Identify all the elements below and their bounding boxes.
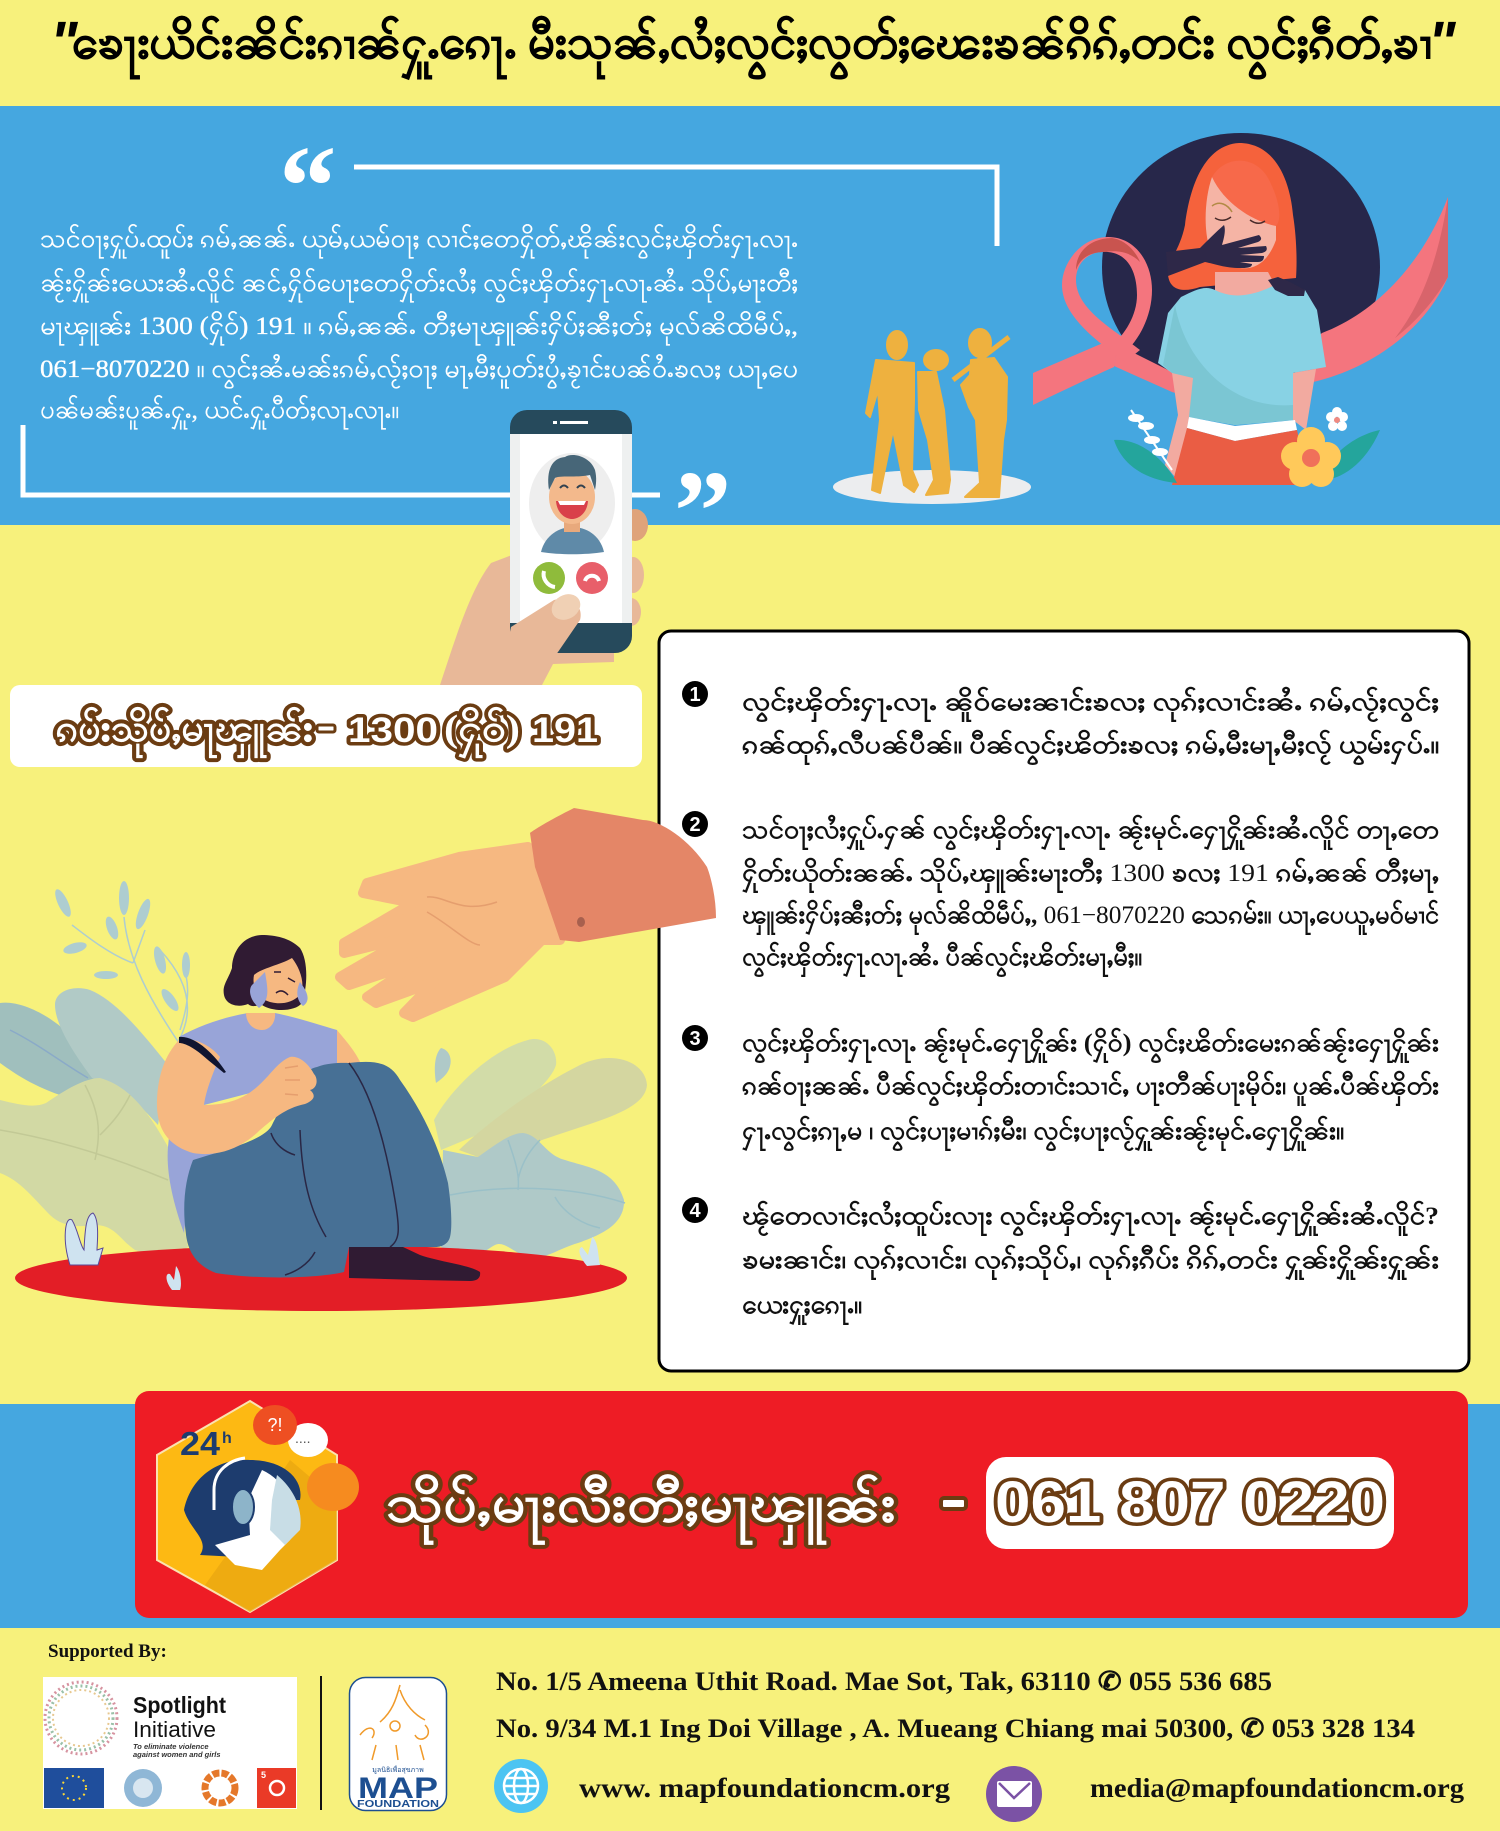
sub-panel: item 3: လွင်ႈၾိတ်းႁႃႉလႃႉ ၼႂ်းမုင်ႉႁေႃႁိူၼ်း (ႁိုဝ်) လွင်ႈၽိတ်းမေးၵၼ်ၼႂ်းႁေႃႁိူၼ်း (742, 1028, 1439, 1063)
address: Chiang Mai: No. 9/34 M.1 Ing Doi Village , A. Mueang Chiang mai 50300, ✆ 053 328 134 (496, 1714, 1415, 1743)
helpline label (10, 685, 642, 767)
divider (320, 1676, 322, 1810)
icon: 24h call center hexagon: h (222, 1430, 232, 1447)
illustration: crying woman (0, 881, 647, 1311)
sub-panel: item 3: ႁႃႉလွင်ႈၵႃႇမ ၊ လွင်ႈပႃႈမၢၵ်ႈမီး၊ လွင်ႈပႃႈလႂ်ႁူၼ်းၼႂ်းမုင်ႉႁေႃႁိူၼ်း။ (742, 1116, 1344, 1151)
logo: MAP Foundation: FOUNDATION (357, 1799, 439, 1810)
title: " (50, 10, 79, 75)
sub-panel: item 4: ၶမးၼၢင်း၊ လုၵ်ႈလၢင်း၊ လုၵ်ႈသိုပ်ႇ၊ လုၵ်ႈၵီပ်း ၵိၵ်ႇတင်း ႁူၼ်းႁိူၼ်းႁူၼ်း (742, 1245, 1439, 1280)
illustration: group of men silhouettes (833, 329, 1031, 504)
phone number: 061 807 0220 (995, 1470, 1385, 1535)
sub-panel: item 2: သင်ဝႃႈလႆႈႁူပ်ႉႁၼ် လွင်ႈၾိတ်းႁႃႉလႃႉ ၼႂ်းမုင်ႉႁေႃႁိူၼ်းၼႆႉလိူင် တႃႇတေ (742, 815, 1439, 850)
logo: Spotlight Initiative: To eliminate violence (133, 1742, 209, 1751)
sub-panel: item 3 (682, 1025, 1439, 1151)
icon: closing quotation mark: ” (674, 448, 732, 575)
email: media@mapfoundationcm.org (1090, 1773, 1465, 1803)
logo: Spotlight Initiative: Spotlight (133, 1692, 226, 1718)
helpline label: 1300 (348, 711, 438, 750)
panel: red hotline banner (135, 1391, 1468, 1618)
sub-panel: item 1: လွင်ႈၾိတ်းႁႃႉလႃႉ ၼိူဝ်မေးၼၢင်းၶလႈ လုၵ်ႈလၢင်းၼႆႉ ၵမ်ႇလႂ်ႈလွင်ႈ (742, 687, 1439, 722)
logo: Spotlight Initiative (43, 1677, 297, 1809)
panel: blue intro band (0, 106, 1500, 525)
sub-panel: item 4 (682, 1197, 1439, 1325)
dash (941, 1498, 966, 1509)
sub-panel: item 2: ႁိုတ်းယိုတ်းၼၼ်ႉ သိုပ်ႇၾူၼ်းမႃးတီႈ 1300 ၶလႈ 191 ၵမ်ႇၼၼ် တီႈမႃႇ (742, 858, 1439, 893)
logo: Spotlight Initiative: 5 (261, 1770, 266, 1780)
sub-panel: item 3: ၵၼ်ဝႃႈၼၼ်ႉ ပီၼ်လွင်ႈၾိတ်းတၢင်းသၢင်ႇ ပႃးတီၼ်ပႃးမိုဝ်း၊ ပူၼ်ႉပီၼ်ၾိတ်း (742, 1071, 1439, 1106)
website: www. mapfoundationcm.org (579, 1773, 951, 1803)
address: Mae Sot: No. 1/5 Ameena Uthit Road. Mae Sot, Tak, 63110 ✆ 055 536 685 (496, 1667, 1272, 1696)
icon: opening quotation mark: “ (279, 123, 336, 250)
icon: 24h call center hexagon: ?! (267, 1415, 283, 1435)
text block: intro: 061−8070220 ။ လွင်ႈၼႆႉမၼ်းၵမ်ႇလႂ်ႈဝႃႈ မႃႇမီႈပူတ်းပွႆႇၶႂၢင်းပၼ်ဝႆႉၶလႈ ယႃႇပေ (40, 354, 798, 389)
phone number (986, 1457, 1394, 1549)
text block: intro: မႃၾူၼ်း 1300 (ႁိုဝ်) 191 ။ ၵမ်ႇၼၼ်ႉ တီႈမႃၾူၼ်းႁိပ်ႈၼီႈတ်ႈ မုလ်ၼိထိမဵပ်ႇ, (40, 311, 798, 346)
logo: Spotlight Initiative: against women and girls (133, 1750, 221, 1759)
heading: call this number: သိုပ်ႇမႃးလီးတီႈမႃၾူၼ်း (386, 1474, 896, 1545)
supported by label: Supported By: (48, 1641, 167, 1662)
icon: 24h call center hexagon (157, 1401, 359, 1612)
sub-panel: item 4: 4 (689, 1200, 701, 1222)
icon: globe (494, 1759, 548, 1813)
logo: MAP Foundation: MAP (358, 1772, 438, 1805)
sub-panel: item 2: လွင်ႈၾိတ်းႁႃႉလႃႉၼႆႉ ပီၼ်လွင်ႈၽိတ်းမႃႇမီႈ။ (742, 942, 1142, 977)
logo: Spotlight Initiative: Initiative (133, 1717, 216, 1742)
sub-panel: item 3: 3 (689, 1028, 701, 1050)
sub-panel: item 1: ၵၼ်ထုၵ်ႇလီပၼ်ပီၼ်။ ပီၼ်လွင်ႈၽိတ်းၶလႈ ၵမ်ႇမီးမႃႇမီႈလႂ် ယွမ်းႁပ်ႉ။ (742, 730, 1439, 765)
logo: MAP Foundation (350, 1678, 446, 1810)
quote frame (23, 167, 997, 495)
badge: number 2: 2 (689, 814, 701, 836)
icon: envelope (986, 1766, 1042, 1822)
helpline label: 191 (532, 711, 598, 750)
text block: intro: ပၼ်မၼ်းပူၼ်ႉႁူႉ, ယင်ႉႁူႉပီတ်ႈလႃႉလႃႉ။ (40, 395, 399, 429)
helpline label: (ႁိုဝ်) (444, 706, 520, 759)
icon: 24h call center hexagon: .... (295, 1430, 311, 1446)
text block: intro (40, 224, 798, 429)
helpline label: ၵပ်းသိုပ်ႇမႃၾူၼ်း (56, 706, 313, 759)
sub-panel: item 1: 1 (689, 684, 701, 706)
panel: blue contact band (0, 1404, 1500, 1628)
logo: MAP Foundation: มูลนิธิเพื่อสุขภาพ (372, 1765, 424, 1774)
title: " (1428, 10, 1457, 75)
badge: number 2 (682, 811, 708, 837)
sub-panel: item 2 (742, 815, 1439, 977)
icon: 24h call center hexagon: 24 (180, 1425, 221, 1462)
panel: numbered information (659, 631, 1469, 1371)
text block: intro: ၼႂ်းႁိူၼ်းယေးၼႆႉလိူင် ၼင်ႇႁိုဝ်ပေႃးတေႁိုတ်းလႆႈ လွင်ႈၾိတ်းႁႃႉလႃႉၼႆႉ သိုပ်ႇမႃးတီႈ (40, 268, 798, 303)
illustration: woman silenced with ribbon (1033, 133, 1448, 487)
sub-panel: item 2: ၾူၼ်းႁိပ်ႈၼီႈတ်ႈ မုလ်ၼိထိမဵပ်ႇ, 061−8070220 သေၵမ်း။ ယႃႇပေယူႇမဝ်မၢင် (742, 900, 1439, 935)
illustration: helping hand (340, 808, 716, 1017)
sub-panel: item 4: ၽႂ်တေလၢင်ႈလႆႈထူပ်းလႃး လွင်ႈၾိတ်းႁႃႉလႃႉ ၼႂ်းမုင်ႉႁေႃႁိူၼ်းၼႆႉလိူင်? (742, 1201, 1439, 1236)
title: ၶေႃးယိင်းၼိင်းၵၢၼ်ႁူႉၵေႃႉ မီးသုၼ်ႇလႆႈလွင်ႈလွတ်ႈၽေးၶၼ်ၵိၵ်ႇတင်း လွင်ႈၵဵတ်ႇၶၢ (72, 15, 1432, 81)
text block: intro: သင်ဝႃႈႁူပ်ႉထူပ်း ၵမ်ႇၼၼ်ႉ ယုမ်ႇယမ်ဝႃႈ လၢင်ႈတေႁိုတ်ႇၽိုၼ်းလွင်ႈၾိတ်းႁႃႉလႃႉ (40, 224, 798, 258)
sub-panel: item 4: ယေးႁူႈၵေႃႉ။ (742, 1292, 862, 1325)
sub-panel: item 1 (682, 681, 1439, 765)
illustration: hand holding phone (440, 410, 648, 685)
